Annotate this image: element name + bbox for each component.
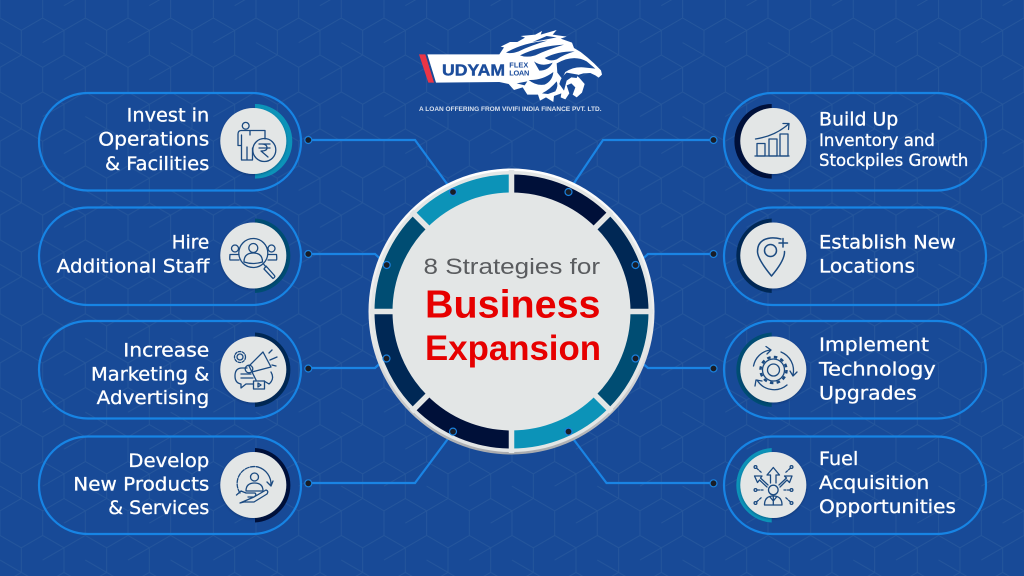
text (819, 109, 968, 171)
logo flex loan: FLEX (509, 61, 528, 70)
text: Hire (172, 231, 209, 253)
text (57, 231, 210, 278)
text: Establish New (819, 231, 956, 253)
icon: team with magnifier (230, 238, 277, 278)
title line: 8 Strategies for (424, 254, 600, 279)
text: Opportunities (819, 496, 956, 518)
panel: increase marketing and advertising (39, 321, 301, 418)
logo tagline: A LOAN OFFERING FROM VIVIFI INDIA FINANCE PVT. LTD. (419, 107, 602, 113)
text: Locations (819, 256, 915, 278)
text: Technology (818, 359, 936, 381)
panel: fuel acquisition opportunities (724, 436, 986, 534)
text: Upgrades (819, 383, 917, 405)
text: Additional Staff (57, 256, 210, 278)
text: Stockpiles Growth (819, 151, 968, 171)
icon: growth bar chart (755, 124, 789, 156)
icon: location pin with plus (758, 238, 788, 276)
logo (419, 30, 602, 113)
icon: hand holding person (236, 467, 273, 503)
text (73, 450, 209, 519)
text: Build Up (819, 109, 898, 131)
text: Fuel (819, 448, 858, 470)
icon: gear with cycle arrows (754, 346, 797, 390)
text: & Facilities (105, 153, 209, 175)
text: & Services (108, 497, 209, 519)
title expansion: Expansion (425, 329, 601, 368)
text: Implement (819, 334, 929, 356)
logo lion mark (419, 30, 602, 102)
panel: implement technology upgrades (724, 321, 986, 418)
text: Advertising (97, 387, 209, 409)
central circle (368, 168, 654, 454)
panel: invest in operations and facilities (39, 93, 301, 190)
text: Acquisition (819, 472, 929, 494)
text: Operations (98, 129, 209, 151)
text: New Products (73, 474, 209, 496)
title business: Business (425, 284, 600, 327)
text: Increase (123, 340, 209, 362)
panel: build up inventory and stockpiles growth (724, 93, 986, 190)
text: Invest in (127, 105, 209, 127)
text (819, 448, 956, 518)
panel: develop new products and services (39, 436, 301, 534)
ring segments (370, 170, 653, 453)
icon: marketing megaphone (234, 350, 277, 389)
ring dots (383, 188, 639, 435)
connector lines (308, 140, 714, 483)
text: Marketing & (91, 364, 209, 386)
text (91, 340, 209, 409)
icon: person with growth arrows (754, 466, 793, 505)
text: Inventory and (819, 131, 935, 151)
panel: establish new locations (724, 208, 986, 305)
text (819, 231, 956, 278)
text (818, 334, 936, 405)
text (98, 105, 209, 175)
logo flex loan: LOAN (509, 68, 529, 77)
icon: person with rupee coin (238, 122, 276, 162)
panel: hire additional staff (39, 208, 301, 305)
text: Develop (128, 450, 209, 472)
logo wordmark: UDYAM (442, 62, 505, 79)
panel connector end dots (305, 136, 717, 487)
